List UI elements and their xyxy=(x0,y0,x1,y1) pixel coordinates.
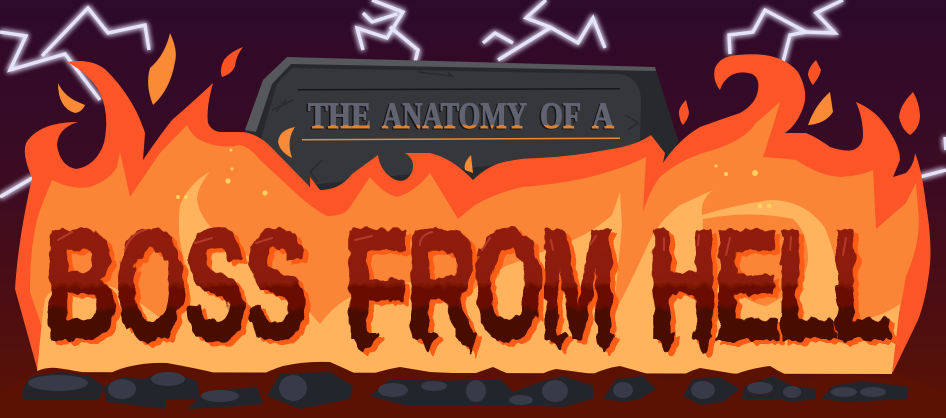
title: BOSS FROM HELL: S xyxy=(185,198,246,371)
title: BOSS FROM HELL: L xyxy=(776,198,838,371)
sparks xyxy=(176,148,771,281)
tombstone plaque xyxy=(245,57,678,190)
engraved line xyxy=(298,88,620,90)
title: BOSS FROM HELL: R xyxy=(407,198,477,371)
coal rocks xyxy=(22,371,908,409)
title: BOSS FROM HELL: O xyxy=(473,198,543,371)
engraved subtitle: THE ANATOMY OF A: ANATOMY xyxy=(382,96,527,137)
ember leaves xyxy=(58,33,920,173)
flame: orange blob behind HELL xyxy=(703,214,808,306)
title: BOSS FROM HELL: S xyxy=(246,198,307,371)
engraved subtitle: THE ANATOMY OF A: OF xyxy=(540,96,581,137)
engraved subtitle: THE ANATOMY OF A: A xyxy=(592,96,614,137)
title: BOSS FROM HELL: M xyxy=(540,198,616,371)
lightning bolts xyxy=(0,0,946,197)
letter highlights xyxy=(58,230,846,255)
plaque cracks xyxy=(272,72,638,182)
title: BOSS FROM HELL: O xyxy=(116,198,186,371)
title: BOSS FROM HELL: H xyxy=(648,198,718,371)
orange rule xyxy=(302,138,620,140)
title: BOSS FROM HELL xyxy=(45,198,893,371)
title: BOSS FROM HELL: B xyxy=(45,198,117,371)
flame: pale yellow core xyxy=(37,172,900,374)
flame: outer red xyxy=(15,54,930,372)
title: BOSS FROM HELL: E xyxy=(713,198,781,371)
rock highlights xyxy=(28,372,886,405)
flame: inner orange xyxy=(30,102,919,372)
engraved subtitle: THE ANATOMY OF A: THE xyxy=(308,96,371,137)
title: BOSS FROM HELL: L xyxy=(831,198,893,371)
engraved subtitle: THE ANATOMY OF A xyxy=(308,96,614,137)
molten ground band xyxy=(0,362,946,418)
title: BOSS FROM HELL: F xyxy=(344,198,408,371)
